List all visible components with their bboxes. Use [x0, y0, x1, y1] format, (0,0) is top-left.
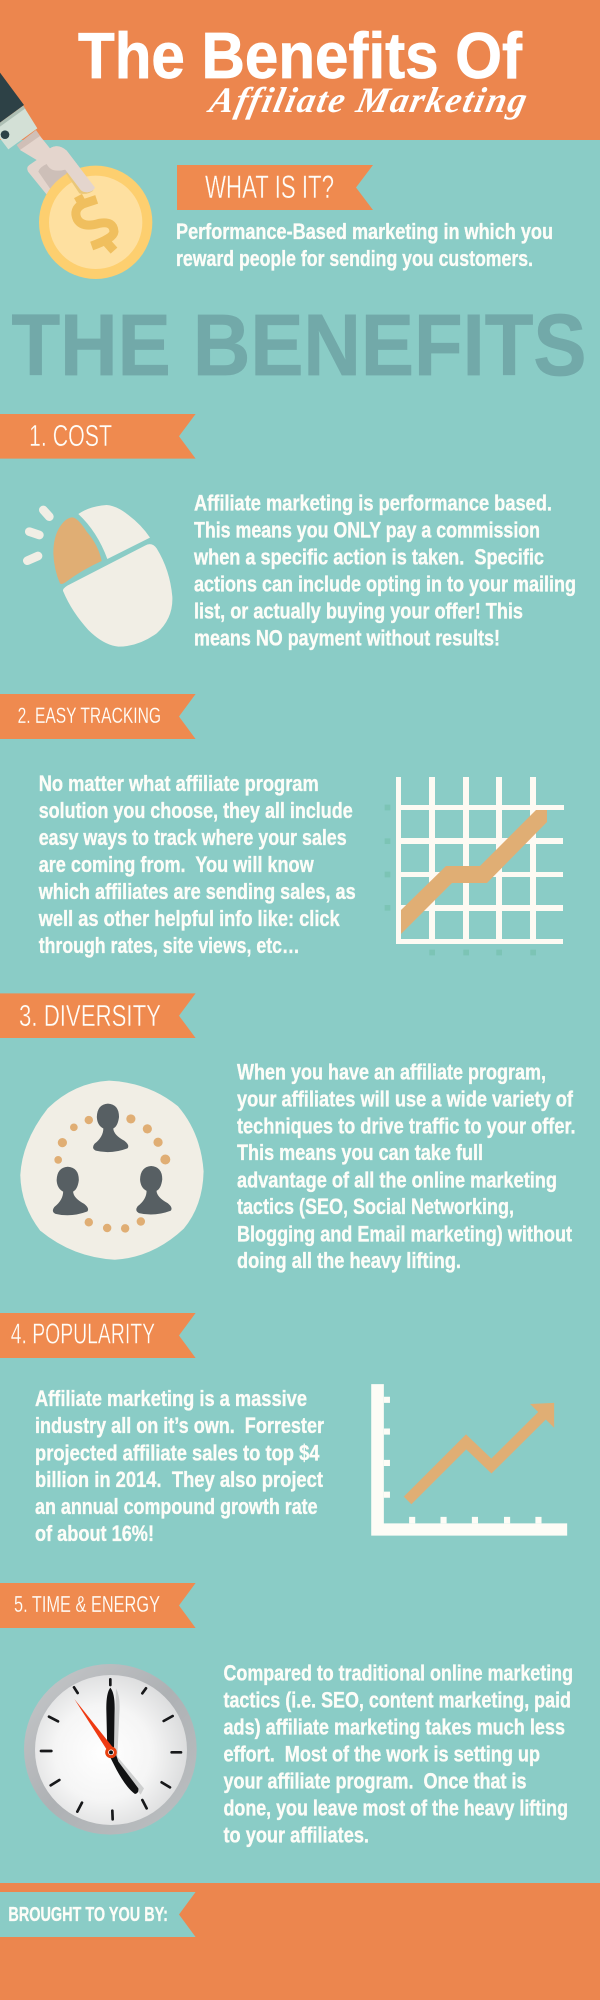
header band: [0, 0, 600, 140]
ribbon: what is it: WHAT IS IT?: [205, 169, 334, 205]
panel: what is it: [176, 165, 553, 271]
icon: computer mouse: [27, 505, 172, 647]
text: popularity: billion in 2014. They also project: [35, 1467, 324, 1492]
icon: wall clock: [24, 1664, 197, 1835]
text: popularity: an annual compound growth rate: [35, 1494, 318, 1519]
ribbon: 2 easy tracking: 2. EASY TRACKING: [18, 703, 161, 728]
panel: 3 diversity: [0, 993, 576, 1273]
ribbon: 4 popularity: [0, 1313, 196, 1358]
icon: people network: [20, 1081, 204, 1260]
icon: hand holding dollar coin: [0, 73, 152, 279]
text: popularity: [35, 1386, 324, 1546]
ribbon: 2 easy tracking: [0, 694, 196, 739]
icon: rising arrow chart: [371, 1384, 567, 1536]
ribbon: 1 cost: [0, 414, 196, 459]
ribbon: 5 time and energy: [0, 1583, 196, 1628]
text: diversity: doing all the heavy lifting.: [237, 1248, 461, 1273]
footer band: [0, 1883, 600, 2000]
ribbon: brought to you by: BROUGHT TO YOU BY:: [8, 1904, 168, 1926]
ribbon: brought to you by: [0, 1892, 196, 1937]
text: popularity: Affiliate marketing is a massive: [35, 1386, 307, 1411]
text: easy tracking: solution you choose, they all include: [39, 798, 353, 823]
ribbon: what is it: [177, 165, 373, 210]
ribbon: 4 popularity: 4. POPULARITY: [11, 1318, 155, 1350]
text: diversity: tactics (SEO, Social Networking,: [237, 1194, 514, 1219]
text: easy tracking: well as other helpful info like: click: [38, 906, 340, 931]
text: popularity: projected affiliate sales to top $4: [35, 1440, 320, 1465]
icon: line chart on grid: [385, 777, 564, 955]
text: time and energy: your affiliate program. Once that is: [224, 1769, 526, 1794]
text: popularity: of about 16%!: [35, 1521, 154, 1546]
text: cost: list, or actually buying your offer! This: [194, 598, 523, 624]
panel: 5 time and energy: [0, 1583, 573, 1848]
panel: 1 cost: [0, 414, 576, 650]
ribbon: 3 diversity: 3. DIVERSITY: [19, 999, 161, 1033]
text: time and energy: to your affiliates.: [224, 1823, 369, 1848]
text: easy tracking: [38, 771, 356, 958]
text: time and energy: effort. Most of the work is setting up: [224, 1742, 540, 1767]
text: diversity: This means you can take full: [237, 1140, 483, 1165]
text: easy tracking: through rates, site views, etc…: [39, 933, 300, 958]
text: diversity: [237, 1060, 576, 1273]
ribbon: 1 cost: 1. COST: [29, 419, 112, 453]
text: time and energy: [224, 1661, 573, 1848]
ribbon: 5 time and energy: 5. TIME & ENERGY: [14, 1591, 160, 1617]
text: cost: means NO payment without results!: [194, 626, 500, 650]
text: cost: [193, 491, 576, 650]
text: easy tracking: which affiliates are sending sales, as: [38, 879, 356, 904]
text: easy tracking: are coming from. You will know: [39, 852, 314, 877]
panel: 4 popularity: [0, 1313, 567, 1546]
text: definition: [176, 219, 553, 271]
panel: 2 easy tracking: [0, 694, 564, 958]
text: easy tracking: No matter what affiliate program: [39, 771, 319, 796]
title: The Benefits Of: [78, 19, 522, 92]
text: popularity: industry all on it’s own. Forrester: [35, 1413, 324, 1438]
text: easy tracking: easy ways to track where your sales: [39, 825, 347, 850]
ribbon: 3 diversity: [0, 993, 196, 1038]
subtitle: Affiliate Marketing: [204, 80, 531, 120]
